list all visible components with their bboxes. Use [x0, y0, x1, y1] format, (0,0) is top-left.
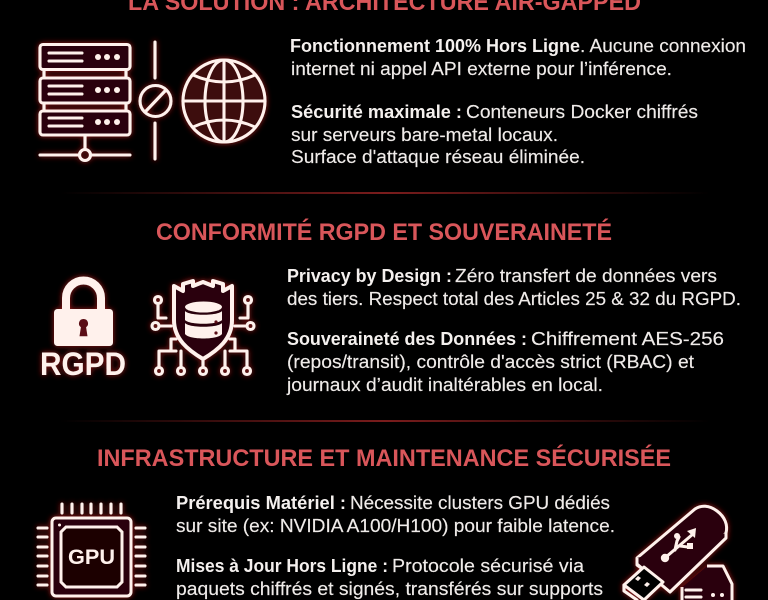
icon: globe — [183, 60, 265, 142]
text: fonctionnement: Fonctionnement 100% Hors Ligne — [290, 35, 580, 56]
text: prérequis matériel: Nécessite clusters GPU dédiés — [350, 492, 610, 513]
text: mises à jour hors ligne: paquets chiffrés et signés, transférés sur supports — [176, 578, 603, 599]
icon: GPU chip — [38, 504, 145, 596]
icon: server rack — [40, 44, 130, 160]
text: sécurité maximale: Conteneurs Docker chiffrés — [466, 101, 698, 122]
text: privacy by design: Privacy by Design : — [287, 265, 452, 286]
panel: conformité RGPD — [40, 218, 741, 395]
text: mises à jour hors ligne: Mises à Jour Hors Ligne : — [176, 555, 388, 576]
text: sécurité maximale — [291, 101, 698, 167]
text: mises à jour hors ligne — [176, 555, 603, 599]
heading: conformité: CONFORMITÉ RGPD ET SOUVERAINETÉ — [156, 218, 612, 246]
text: souveraineté des données — [286, 328, 724, 395]
icon: RGPD padlock — [40, 280, 126, 382]
text: fonctionnement: internet ni appel API externe pour l’inférence. — [291, 58, 672, 79]
icon: RGPD padlock: RGPD — [40, 346, 126, 382]
text: sécurité maximale: sur serveurs bare-metal locaux. — [291, 124, 558, 145]
text: souveraineté des données: Souveraineté des Données : — [287, 328, 527, 349]
text: prérequis matériel: sur site (ex: NVIDIA A100/H100) pour faible latence. — [176, 515, 615, 536]
text: souveraineté des données: Chiffrement AES-256 — [531, 328, 724, 349]
text: privacy by design: Zéro transfert de données vers — [455, 265, 717, 286]
text: prérequis matériel: Prérequis Matériel : — [176, 492, 346, 513]
icon: GPU chip: GPU — [68, 546, 115, 569]
text: souveraineté des données: journaux d’audit inaltérables en local. — [286, 374, 603, 395]
panel: infrastructure et maintenance — [38, 444, 732, 600]
icon: shield with database — [152, 281, 254, 374]
text: mises à jour hors ligne: Protocole sécurisé via — [392, 555, 585, 576]
text: prérequis matériel — [176, 492, 615, 536]
text: privacy by design: des tiers. Respect total des Articles 25 & 32 du RGPD. — [287, 288, 741, 309]
icon: server under USB — [682, 566, 732, 600]
text: souveraineté des données: (repos/transit), contrôle d'accès strict (RBAC) et — [287, 351, 694, 372]
text: sécurité maximale: Sécurité maximale : — [291, 101, 462, 122]
panel: air-gapped solution — [40, 0, 746, 167]
heading: infrastructure: INFRASTRUCTURE ET MAINTENANCE SÉCURISÉE — [97, 444, 671, 472]
icon: blocked connection — [140, 42, 171, 159]
icon: USB drive — [624, 506, 727, 600]
text: fonctionnement: . Aucune connexion — [580, 35, 746, 56]
text: sécurité maximale: Surface d'attaque réseau éliminée. — [291, 146, 585, 167]
text: fonctionnement — [290, 35, 746, 79]
text: privacy by design — [287, 265, 741, 309]
